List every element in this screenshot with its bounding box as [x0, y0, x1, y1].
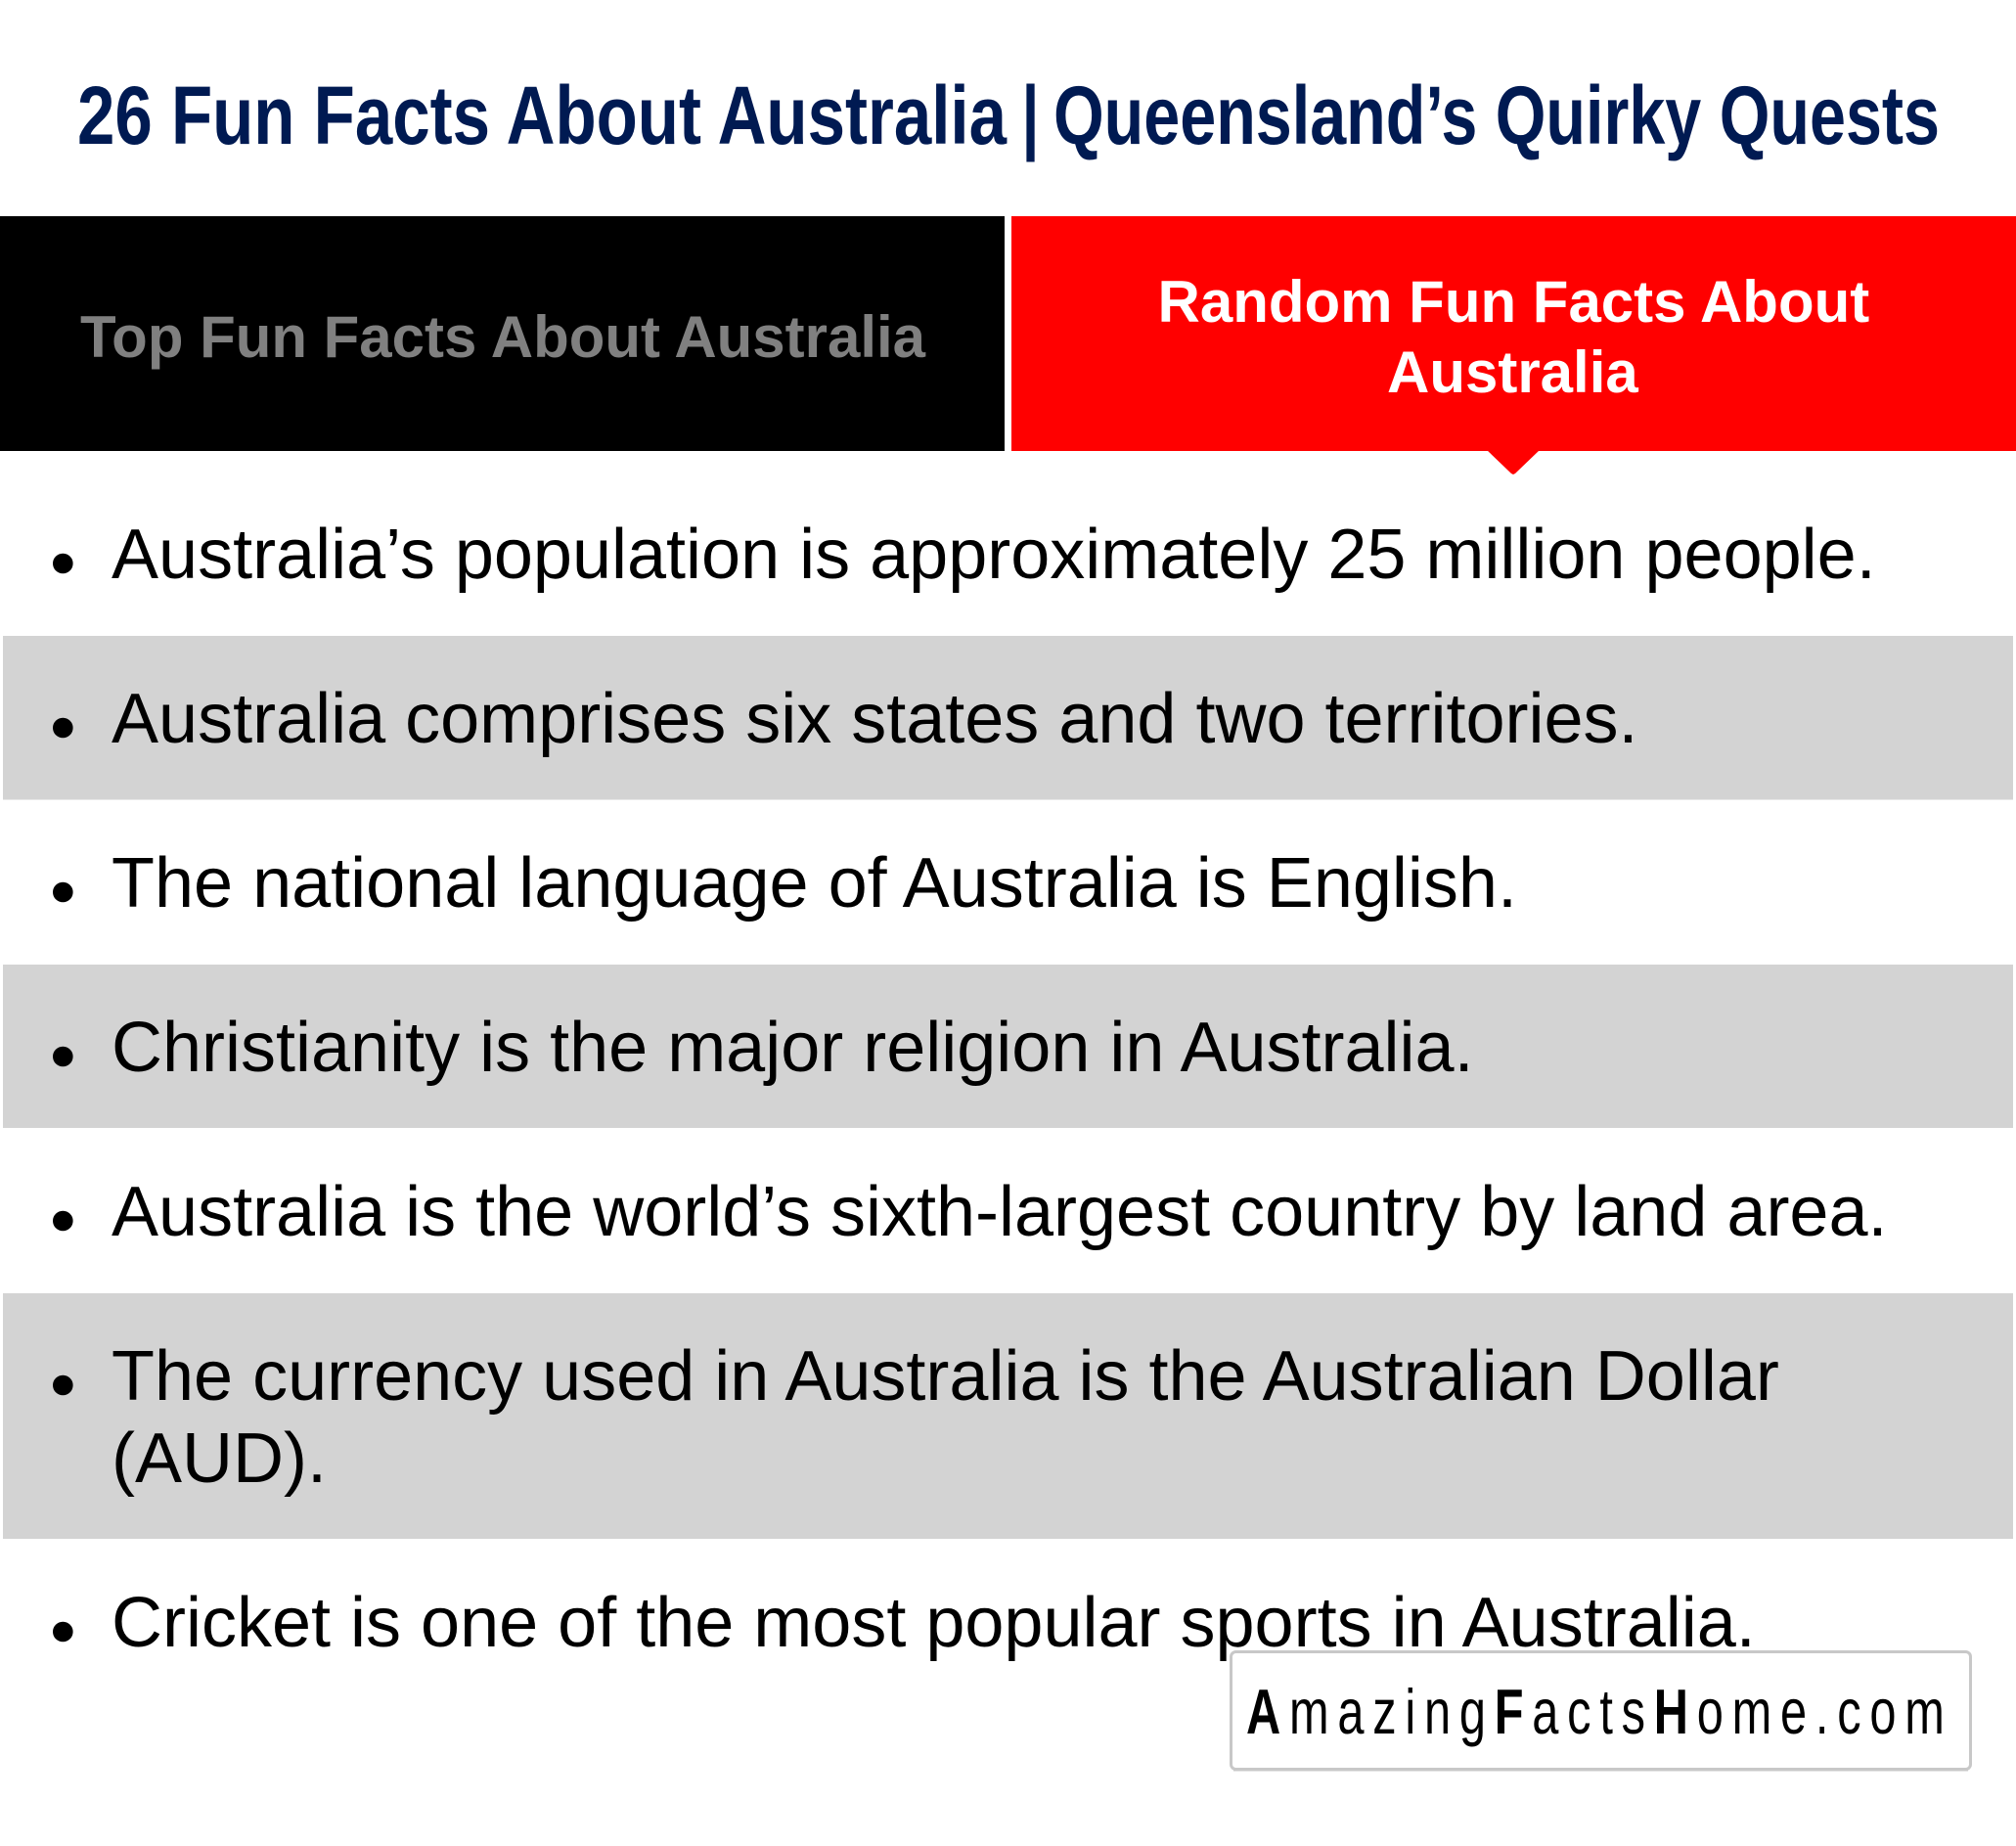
tab label: random fun facts: Random Fun Facts About [1158, 269, 1869, 335]
fact 2 row: Australia comprises six states and two territories. [112, 680, 1638, 758]
fact 6 row: The currency used in Australia is the Australian Dollar [112, 1337, 1779, 1416]
tab pointer arrow [1487, 450, 1540, 474]
fact 6 row: (AUD). [112, 1419, 327, 1498]
watermark box [1231, 1651, 1970, 1771]
tab label: random fun facts: Australia [1387, 339, 1638, 405]
fact 2 row [3, 636, 2013, 800]
fact 5: Australia is the world’s sixth-largest country by land area. [112, 1173, 1888, 1251]
fact 4 row [3, 965, 2013, 1128]
fact 6 row [3, 1293, 2013, 1539]
fact 7: Cricket is one of the most popular sports in Australia. [112, 1584, 1756, 1662]
tab: top fun facts (inactive) [0, 216, 1005, 451]
title [77, 69, 1940, 162]
fact 3: The national language of Australia is English. [112, 844, 1517, 923]
fact 4 row: Christianity is the major religion in Australia. [112, 1009, 1474, 1087]
title: | [1021, 69, 1039, 162]
tab label: top fun facts: Top Fun Facts About Australia [80, 304, 926, 370]
watermark text: AmazingFactsHome.com [1246, 1677, 1953, 1748]
tab: random fun facts (active) [1011, 216, 2016, 474]
fact 1: Australia’s population is approximately 25 million people. [112, 516, 1876, 594]
title: 26 Fun Facts About Australia [77, 69, 1008, 161]
